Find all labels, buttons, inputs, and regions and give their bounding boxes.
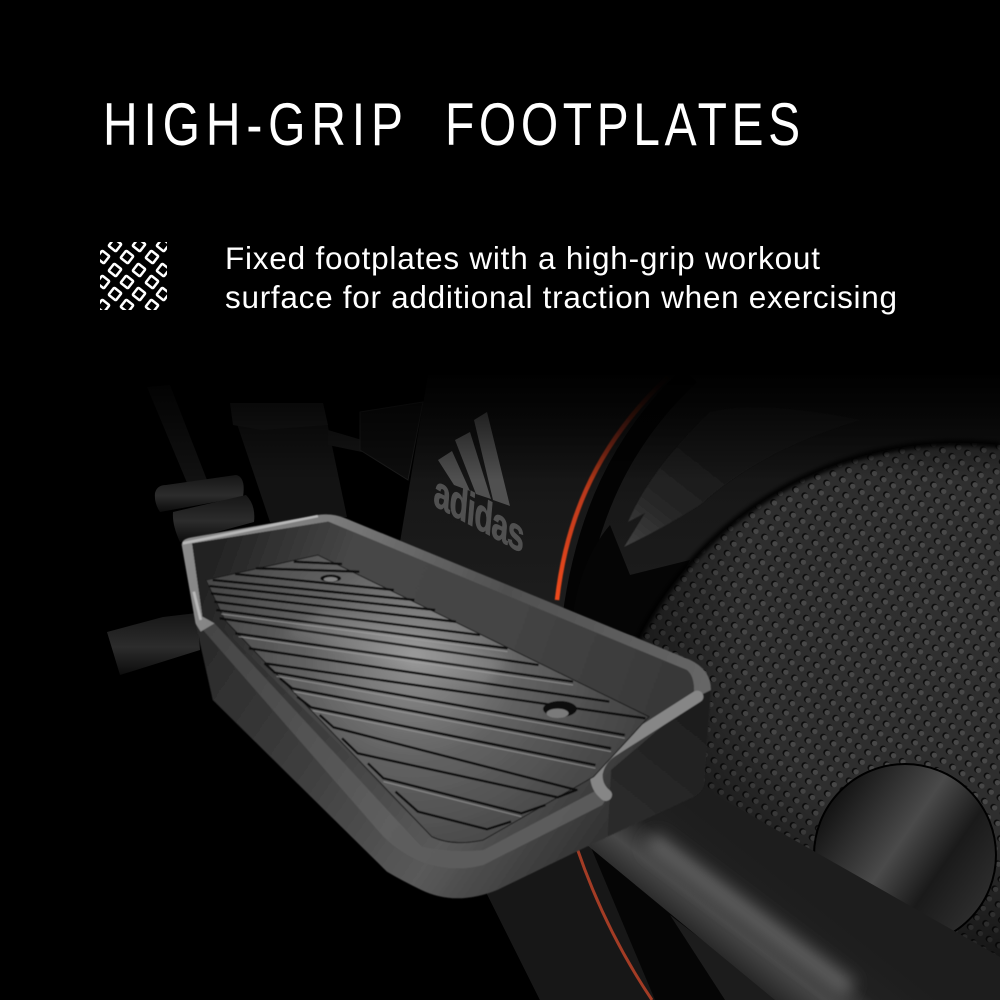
- floor sheen: [283, 610, 508, 687]
- logo bars: [438, 412, 510, 506]
- logo wordmark: adidas: [432, 464, 526, 563]
- grooves: [209, 562, 645, 829]
- top rim: [182, 514, 711, 698]
- pivot joints: [155, 475, 254, 542]
- glossy highlight on housing: [624, 408, 860, 547]
- front lip: [197, 623, 608, 868]
- left upright tube: [147, 385, 207, 490]
- groove highlights: [221, 614, 625, 817]
- ribbed floor: [206, 555, 649, 843]
- right side block: [608, 690, 711, 837]
- connecting bracket: [328, 402, 423, 480]
- inner wall: [192, 522, 694, 843]
- black channel beside red line: [572, 375, 690, 620]
- mounting bolt rear: [320, 575, 341, 582]
- title word 2: FOOTPLATES: [445, 91, 800, 158]
- red accent line lower: [577, 848, 652, 1000]
- centre post: [230, 403, 347, 522]
- centre hub: [814, 764, 996, 946]
- mounting bolt front: [543, 701, 577, 718]
- main housing: [397, 375, 1000, 1000]
- description line 1: Fixed footplates with a high-grip workout: [225, 240, 820, 276]
- footplate body: [182, 514, 711, 898]
- icon: grip pattern: [100, 242, 167, 310]
- inner right corner rim: [596, 697, 697, 795]
- rim highlight: [183, 516, 318, 620]
- lower housing: [480, 840, 690, 1000]
- description text: [225, 240, 897, 315]
- main arm: [587, 788, 1000, 1000]
- red accent line upper: [557, 377, 668, 600]
- footplate: [182, 514, 711, 898]
- adidas logo: [432, 412, 526, 563]
- title: [103, 91, 800, 158]
- bike frame in the background: [100, 360, 1000, 1000]
- title word 1: HIGH-GRIP: [103, 91, 403, 158]
- disc edge: [598, 443, 1000, 1000]
- dark grooves: [209, 562, 645, 829]
- scene fade at top: [100, 360, 1000, 480]
- dark pocket below channel: [572, 525, 690, 640]
- description line 2: surface for additional traction when exercising: [225, 279, 897, 315]
- textured disc: [640, 440, 1000, 1000]
- lower cut-out with texture: [590, 845, 790, 1000]
- rear handle: [107, 613, 200, 675]
